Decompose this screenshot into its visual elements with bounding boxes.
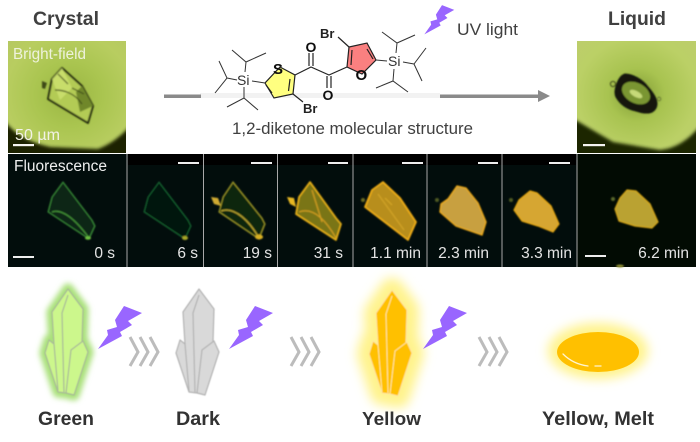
- reaction arrow: [164, 90, 550, 102]
- crystal in bright field: [42, 68, 93, 123]
- molecular structure: O: [306, 39, 316, 55]
- label: 50 µm: 50 µm: [15, 127, 60, 144]
- molecular structure: O: [322, 87, 334, 103]
- arrow: chevrons 1: [130, 337, 158, 366]
- frame: 0 s: [48, 182, 95, 240]
- silyl groups: [215, 32, 426, 110]
- thiophene ring: [265, 67, 295, 98]
- time stamps: 2.3 min: [438, 245, 489, 262]
- label: UV light: UV light: [457, 20, 518, 39]
- frame: 6 s: [144, 182, 191, 240]
- panel: bright-field liquid micrograph: [577, 41, 696, 153]
- molecular structure: [215, 26, 426, 116]
- molecular structure: O: [356, 67, 368, 84]
- time stamps: 0 s: [94, 245, 115, 262]
- label: Bright-field: Bright-field: [13, 46, 86, 63]
- icon: UV bolt 1: [98, 306, 142, 349]
- stage: yellow crystal: [369, 290, 412, 396]
- stage: dark crystal: [176, 289, 219, 395]
- heading: Liquid: Liquid: [608, 8, 666, 30]
- label: Yellow: Yellow: [362, 408, 421, 429]
- frame: 31 s: [287, 182, 341, 240]
- arrow: chevrons 3: [479, 337, 507, 366]
- furan ring: [347, 43, 376, 74]
- label: Fluorescence: Fluorescence: [14, 158, 107, 175]
- time stamps: 31 s: [314, 245, 343, 262]
- molecular structure: Br: [320, 26, 334, 41]
- time stamps: 1.1 min: [370, 245, 421, 262]
- time stamps: 3.3 min: [521, 245, 572, 262]
- time stamps: 6 s: [177, 245, 198, 262]
- label: Green: Green: [38, 409, 94, 430]
- caption: molecular structure: 1,2-diketone molecular structure: [232, 119, 473, 138]
- frame: 1.1 min: [361, 182, 416, 240]
- label: Dark: Dark: [176, 408, 220, 430]
- label: Yellow, Melt: Yellow, Melt: [542, 409, 655, 430]
- icon: UV bolt 3: [423, 306, 467, 349]
- time stamps: 19 s: [243, 245, 272, 262]
- time stamps: [94, 245, 689, 262]
- scale bar: [583, 144, 605, 146]
- heading: Crystal: Crystal: [33, 8, 99, 30]
- frame dividers: [127, 154, 577, 267]
- frame: 19 s: [211, 182, 265, 240]
- melted droplet: [610, 74, 661, 113]
- molecular structure: S: [273, 61, 283, 78]
- panel: bright-field crystal micrograph: [8, 41, 126, 153]
- bonds: [266, 37, 373, 102]
- frame: 2.3 min: [435, 186, 486, 235]
- icon: UV lightning bolt: [424, 5, 454, 34]
- scale bar: [13, 144, 34, 146]
- time stamps: 6.2 min: [638, 245, 689, 262]
- stage: green crystal: [45, 289, 88, 395]
- arrow: chevrons 2: [291, 337, 319, 366]
- icon: UV bolt 2: [229, 306, 273, 349]
- molecular structure: Si: [388, 53, 400, 69]
- molecular structure: Si: [237, 72, 249, 88]
- frame: 3.3 min: [509, 191, 559, 232]
- panel: fluorescence time series: [8, 154, 696, 268]
- frame: 6.2 min: [611, 190, 658, 268]
- scale bars: [13, 162, 606, 258]
- stage: yellow melt droplet: [548, 323, 648, 379]
- molecular structure: Br: [303, 101, 317, 116]
